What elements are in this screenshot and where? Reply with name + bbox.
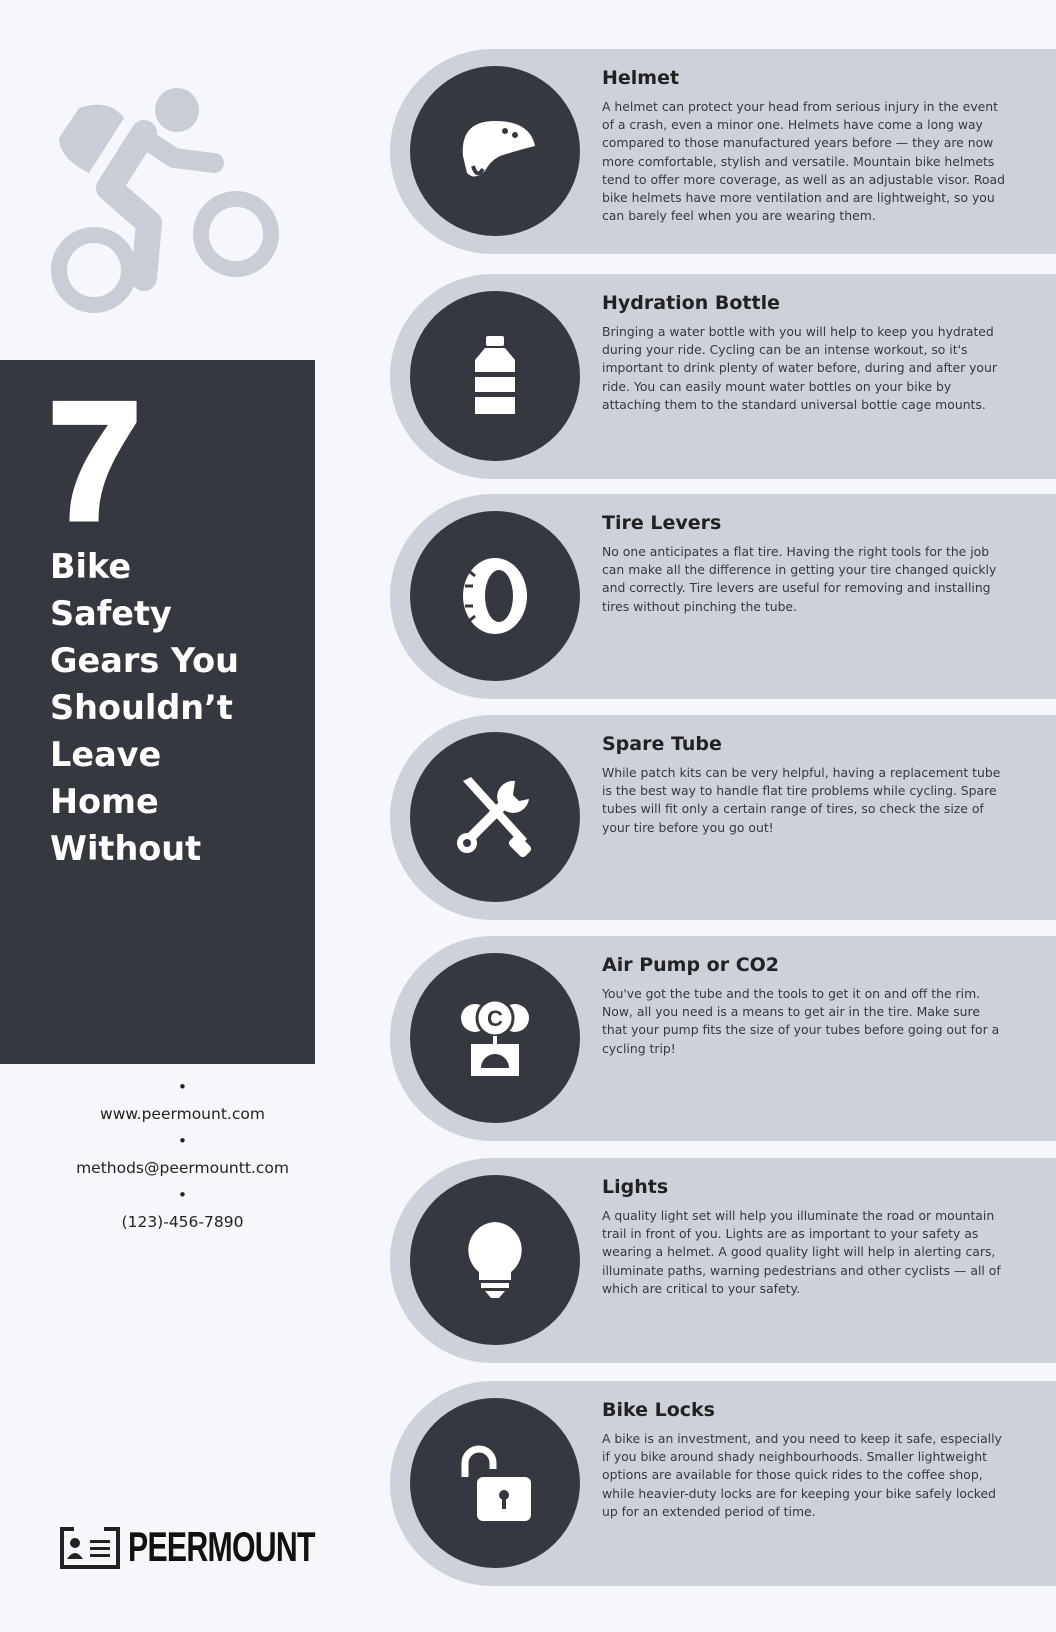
panel: spare tube: Spare Tube <box>602 733 722 755</box>
contact info: • <box>178 1078 187 1096</box>
contact info: • <box>178 1186 187 1204</box>
panel: hydration bottle: Hydration Bottle <box>602 292 780 314</box>
panel: tire levers: Tire Levers <box>602 512 721 534</box>
icon: tools <box>410 732 580 902</box>
panel: helmet: A helmet can protect your head from serious injury in the event of a crash, even a minor one. Helmets have come a long way compared to those manufactured years before — they are now more comfortable, stylish and versatile. Mountain bike helmets tend to offer more coverage, as well as an adjustable visor. Road bike helmets have more ventilation and are lightweight, so you can barely feel when you are wearing them. <box>602 99 1005 223</box>
contact info: • <box>178 1132 187 1150</box>
panel: air pump: Air Pump or CO2 <box>602 954 779 976</box>
heading: Leave <box>50 735 161 774</box>
panel: lights: Lights <box>602 1176 668 1198</box>
heading: Without <box>50 829 201 868</box>
logo: PEERMOUNT <box>128 1523 315 1570</box>
icon: bottle <box>410 291 580 461</box>
icon: co2: C <box>487 1006 503 1031</box>
panel: bike locks: Bike Locks <box>602 1399 715 1421</box>
heading: Gears You <box>50 641 239 680</box>
heading: Home <box>50 782 159 821</box>
icon: tire <box>410 511 580 681</box>
panel: bike locks: A bike is an investment, and you need to keep it safe, especially if you bike around shady neighbourhoods. Smaller lightweight options are available for those quick rides to the coffee shop, while heavier-duty locks are for keeping your bike safely locked up for an extended period of time. <box>602 1431 1002 1519</box>
icon: helmet <box>410 66 580 236</box>
heading: Bike <box>50 547 131 586</box>
heading: Safety <box>50 594 172 633</box>
panel: tire levers: No one anticipates a flat tire. Having the right tools for the job can make all the difference in getting your tire changed quickly and correctly. Tire levers are useful for removing and installing tires without pinching the tube. <box>602 544 996 614</box>
panel: lights <box>390 1158 1056 1363</box>
panel: title <box>0 360 315 1064</box>
panel: spare tube <box>390 715 1056 920</box>
panel: air pump: You've got the tube and the tools to get it on and off the rim. Now, all you need is a means to get air in the tire. Make sure that your pump fits the size of your tubes before going out for a cycling trip! <box>602 986 999 1056</box>
panel: helmet: Helmet <box>602 67 679 89</box>
contact info: (123)-456-7890 <box>122 1213 243 1231</box>
heading <box>50 547 239 868</box>
panel: air pump <box>390 936 1056 1141</box>
panel: hydration bottle <box>390 274 1056 479</box>
icon: co2 <box>410 953 580 1123</box>
heading: Shouldn’t <box>50 688 233 727</box>
panel: tire levers <box>390 494 1056 699</box>
contact info: www.peermount.com <box>100 1105 265 1123</box>
number 7: 7 <box>48 367 141 555</box>
icon: bulb <box>410 1175 580 1345</box>
panel: spare tube: While patch kits can be very helpful, having a replacement tube is the best way to handle flat tire problems while cycling. Spare tubes will fit only a certain range of tires, so check the size of your tire before you go out! <box>602 765 1000 835</box>
contact info <box>76 1078 289 1231</box>
panel: hydration bottle: Bringing a water bottle with you will help to keep you hydrated during your ride. Cycling can be an intense workout, so it's important to drink plenty of water before, during and after your ride. You can easily mount water bottles on your bike by attaching them to the standard universal bottle cage mounts. <box>602 324 997 412</box>
icon: cyclist <box>51 88 279 313</box>
contact info: methods@peermountt.com <box>76 1159 289 1177</box>
panel: lights: A quality light set will help you illuminate the road or mountain trail in front of you. Lights are as important to your safety as wearing a helmet. A good quality light will help in alerting cars, illuminate paths, warning pedestrians and other cyclists — all of which are critical to your safety. <box>602 1208 1001 1296</box>
panel: bike locks <box>390 1381 1056 1586</box>
icon: lock <box>410 1398 580 1568</box>
panel: helmet <box>390 49 1056 254</box>
